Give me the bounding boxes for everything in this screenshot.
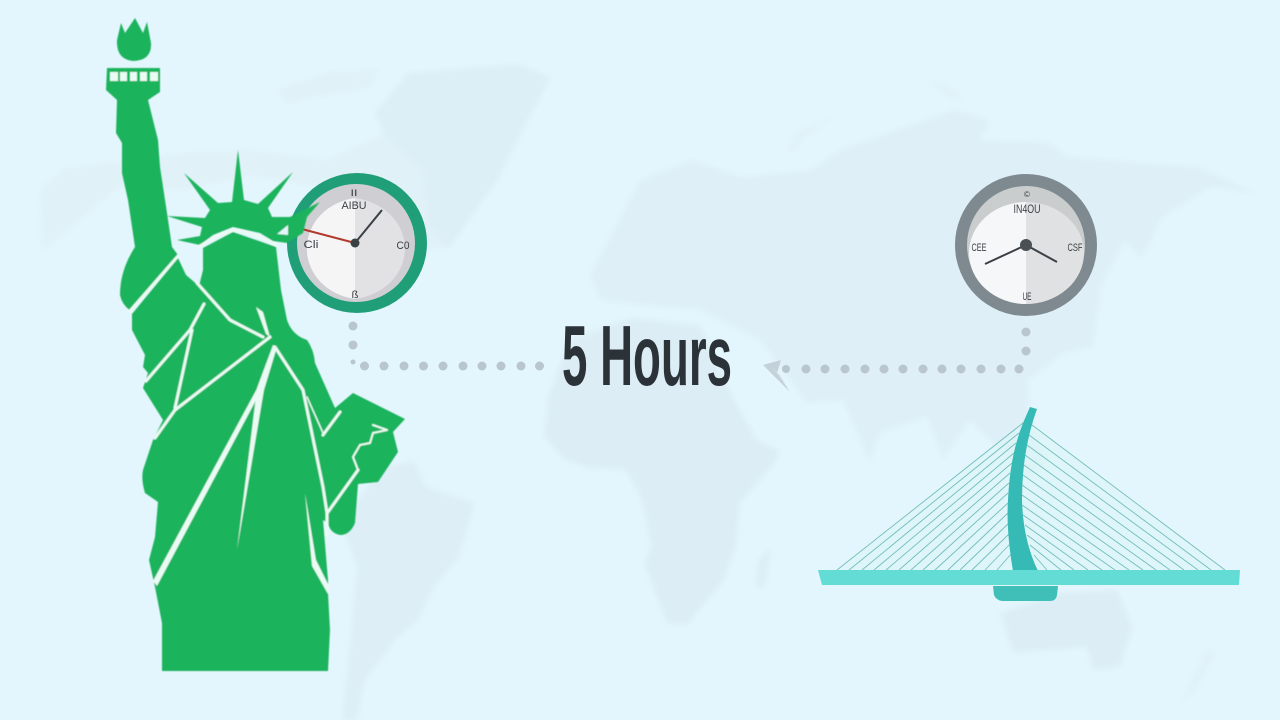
clock labels: IN4OU: [1014, 202, 1040, 216]
map: north america: [40, 134, 449, 252]
clock labels: AIBU: [342, 200, 367, 212]
arrow head pointing left: [763, 360, 790, 392]
crown: [167, 150, 320, 245]
robe fold lines: [130, 230, 387, 535]
torch windows: [110, 72, 158, 81]
map: madagascar: [755, 547, 771, 587]
map: new zealand: [1183, 650, 1216, 703]
clock: second city: [955, 174, 1097, 316]
clock hub: [1020, 239, 1032, 251]
clock labels: C0: [396, 240, 410, 252]
raised arm: [116, 100, 178, 311]
map: svalbard: [926, 80, 966, 100]
clock labels: UE: [1022, 291, 1032, 303]
map: novaya zemlya: [787, 117, 836, 152]
clock labels: ß: [352, 290, 358, 301]
black hour hand: [355, 210, 382, 243]
robe and body: [132, 232, 405, 671]
clock labels: CEE: [972, 242, 986, 254]
clock labels: [972, 190, 1083, 303]
clock labels: [304, 188, 410, 301]
left connector dots: [348, 322, 544, 370]
right cables: [1022, 425, 1225, 570]
clock labels: Cli: [304, 239, 318, 251]
right connector dots: [782, 328, 1030, 374]
map: greenland: [375, 64, 551, 248]
bridge: [818, 407, 1240, 601]
statue of liberty: [106, 18, 405, 671]
clock labels: CSF: [1068, 242, 1083, 254]
cable fan shading: [837, 423, 1225, 570]
bridge tower: [1008, 407, 1038, 571]
map: south america: [340, 460, 475, 720]
clock labels: ©: [1024, 190, 1030, 199]
clock: new york: [287, 173, 427, 313]
clock labels: II: [350, 188, 358, 198]
torch platform: [106, 68, 160, 100]
clock hands: [985, 245, 1057, 264]
crown gap: [277, 225, 288, 235]
robe tapered folds: [153, 307, 329, 594]
bridge pier: [993, 586, 1058, 601]
map: australia: [1000, 590, 1133, 670]
torch flame: [117, 18, 151, 61]
bridge deck: [818, 570, 1240, 585]
left cables: [837, 423, 1023, 570]
heading: 5 Hours: 5 Hours: [562, 309, 732, 404]
map: europe and asia: [590, 110, 1256, 480]
clock hub: [350, 238, 360, 248]
red minute hand: [298, 228, 355, 243]
map: africa: [544, 318, 779, 625]
map: arctic islands: [278, 69, 380, 104]
